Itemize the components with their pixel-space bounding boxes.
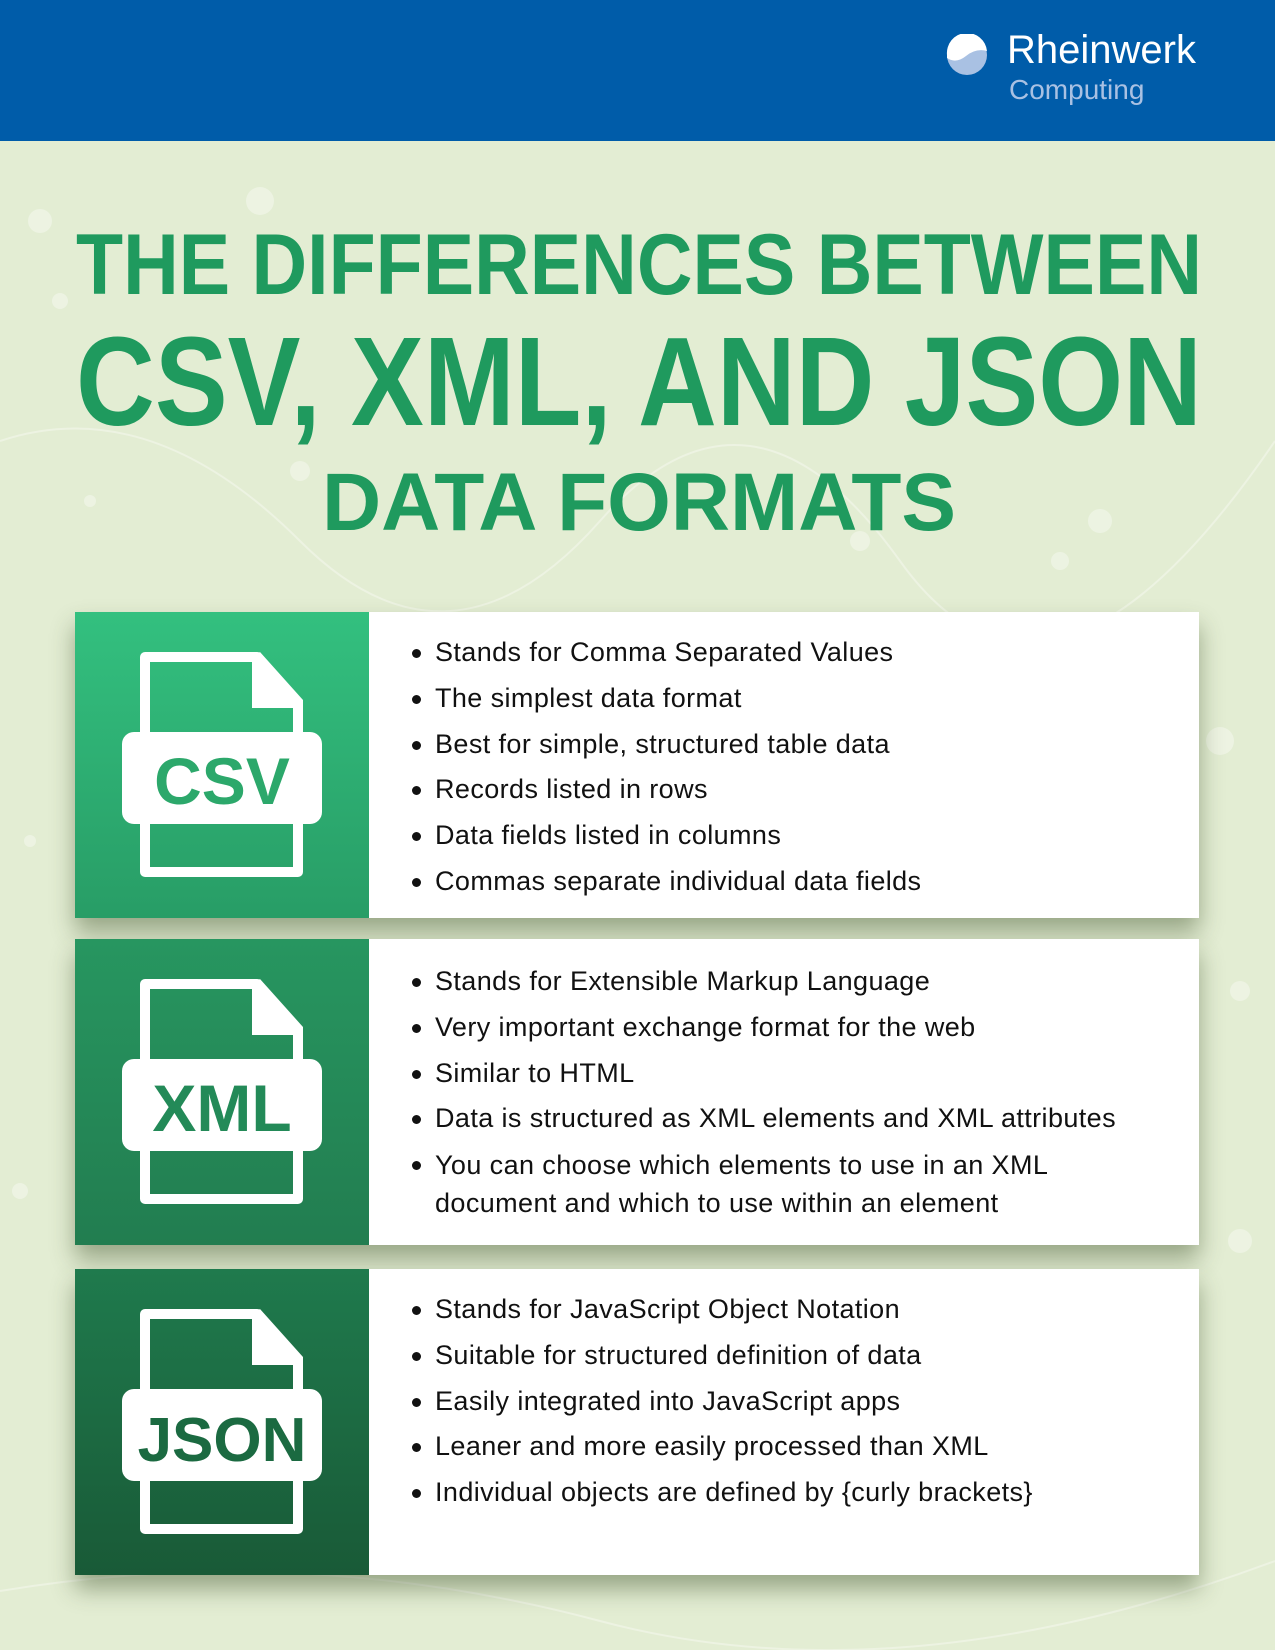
text: JSON bullets: Individual objects are defined by {curly brackets} — [435, 1477, 1033, 1507]
icon: XML file — [122, 979, 322, 1204]
text: XML bullets — [412, 966, 1116, 1218]
logo: Rheinwerk — [1007, 28, 1196, 72]
text: CSV bullets — [412, 637, 921, 896]
text: XML bullets: You can choose which elements to use in an XML — [435, 1150, 1048, 1180]
icon: CSV file: CSV — [154, 744, 290, 818]
text: CSV bullets: Commas separate individual data fields — [435, 866, 921, 896]
icon: XML file: XML — [152, 1071, 292, 1145]
text: CSV bullets: Records listed in rows — [435, 774, 708, 804]
icon: logo wave — [946, 34, 987, 75]
text: JSON bullets: Easily integrated into JavaScript apps — [435, 1386, 900, 1416]
text: CSV bullets: Data fields listed in columns — [435, 820, 781, 850]
panel: CSV — [75, 612, 1199, 918]
icon: JSON file — [122, 1309, 322, 1534]
text: JSON bullets: Suitable for structured definition of data — [435, 1340, 922, 1370]
text: XML bullets: document and which to use within an element — [435, 1188, 999, 1218]
text: CSV bullets: Stands for Comma Separated Values — [435, 637, 893, 667]
icon: JSON file: JSON — [138, 1406, 306, 1475]
text: CSV bullets: The simplest data format — [435, 683, 742, 713]
logo — [946, 28, 1196, 105]
text: CSV bullets: Best for simple, structured table data — [435, 729, 890, 759]
text: JSON bullets: Leaner and more easily processed than XML — [435, 1431, 989, 1461]
panel: XML — [75, 939, 1199, 1245]
text: XML bullets: Data is structured as XML elements and XML attributes — [435, 1103, 1116, 1133]
icon: CSV file — [122, 652, 322, 877]
title — [76, 217, 1202, 548]
text: XML bullets: Similar to HTML — [435, 1058, 635, 1088]
text: JSON bullets: Stands for JavaScript Object Notation — [435, 1294, 900, 1324]
text: XML bullets: Stands for Extensible Markup Language — [435, 966, 930, 996]
panel: JSON — [75, 1269, 1199, 1575]
text: XML bullets: Very important exchange format for the web — [435, 1012, 976, 1042]
text: JSON bullets — [412, 1294, 1033, 1507]
logo: Computing — [1009, 74, 1144, 105]
title: DATA FORMATS — [322, 457, 956, 548]
header bar — [0, 0, 1275, 141]
